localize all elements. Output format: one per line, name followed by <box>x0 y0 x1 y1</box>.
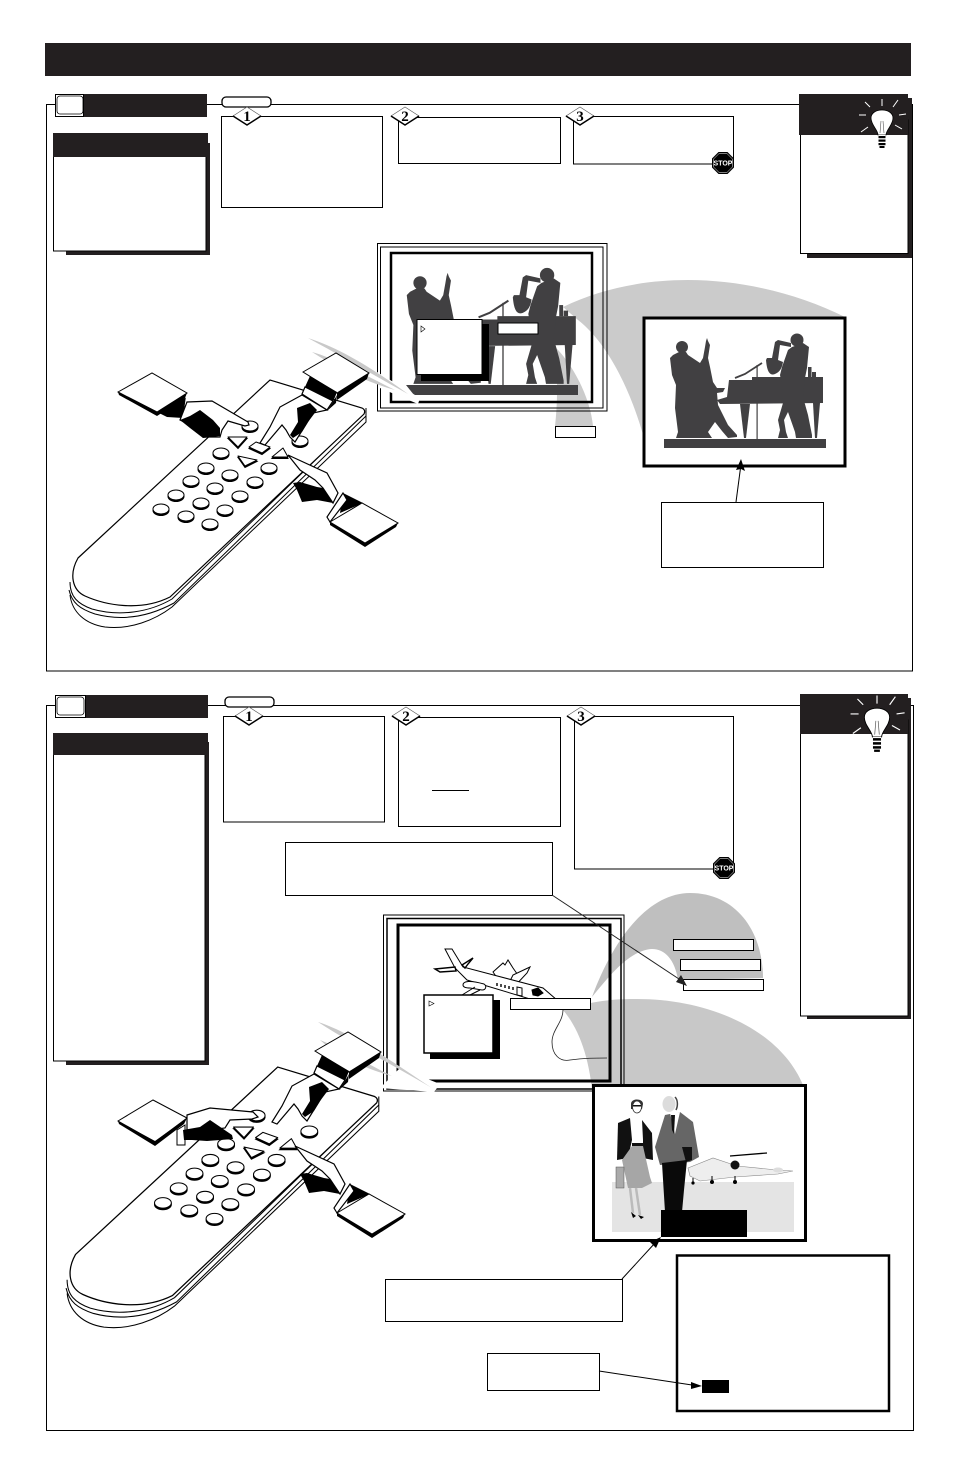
enlarged picture <box>594 1086 806 1240</box>
icon: stop sign <box>713 857 735 879</box>
step 2 box: 2 <box>401 109 409 125</box>
hint box <box>677 1256 889 1411</box>
woman <box>616 1100 653 1219</box>
on-screen tag <box>498 323 538 334</box>
TV screen with menu <box>378 244 607 411</box>
panel border bottom <box>46 706 914 1430</box>
small label tag <box>556 426 596 438</box>
gray swooshes <box>563 893 803 1100</box>
pill label <box>222 97 271 107</box>
sidebar box <box>53 133 210 255</box>
heading tab <box>55 94 207 117</box>
callout with arrow to hint <box>488 1354 702 1390</box>
channel tags <box>674 940 764 990</box>
small plane <box>688 1153 793 1185</box>
antenna wire <box>552 1010 607 1060</box>
silhouette band <box>406 268 578 395</box>
on-screen menu <box>424 995 500 1059</box>
black caption box <box>661 1210 747 1237</box>
step 3 box <box>566 107 734 164</box>
pill label <box>225 697 274 707</box>
enlarged picture <box>644 318 845 466</box>
TV screen with plane <box>384 915 624 1091</box>
icon: light bulb <box>851 696 905 752</box>
title bar <box>45 43 911 76</box>
remote control with pressing hands <box>69 353 398 628</box>
callout with arrow to caption <box>386 1237 661 1322</box>
step 1 box <box>224 707 384 822</box>
step 2 box <box>392 707 560 826</box>
remote signal beam <box>318 1022 440 1092</box>
step 1 box: 1 <box>243 109 251 125</box>
step 3 box: 3 <box>576 109 584 125</box>
hand: left <box>118 1100 258 1146</box>
remote signal beam <box>308 338 420 404</box>
panel border top <box>46 104 912 671</box>
panel: top section <box>46 94 912 671</box>
hand: top <box>272 1032 381 1124</box>
step 1 box <box>222 107 382 208</box>
tip box <box>799 94 912 258</box>
step 2 box: 2 <box>402 709 410 725</box>
step 3 box <box>567 707 734 869</box>
step 3 box: 3 <box>577 709 585 725</box>
hand: top <box>260 353 369 445</box>
hand: right <box>288 455 398 547</box>
on-screen tag <box>510 998 590 1010</box>
panel: bottom section <box>46 694 914 1430</box>
hand: right <box>295 1146 405 1238</box>
step 2 box <box>391 107 560 164</box>
step 1 box: 1 <box>245 709 253 725</box>
heading tab <box>55 695 208 718</box>
man <box>655 1096 699 1212</box>
ground <box>612 1182 794 1232</box>
gray swoosh from TV to enlarged picture <box>553 280 845 438</box>
tip box <box>800 694 911 1019</box>
callout with arrow to tag <box>286 842 687 986</box>
plane <box>435 949 557 1002</box>
on-screen menu <box>417 320 489 381</box>
sidebar box <box>53 733 209 1065</box>
icon: light bulb <box>859 99 906 148</box>
callout with arrow <box>662 459 824 568</box>
hand: left <box>118 373 249 438</box>
remote control with pressing hands <box>66 1032 405 1328</box>
icon: stop sign <box>712 152 734 174</box>
